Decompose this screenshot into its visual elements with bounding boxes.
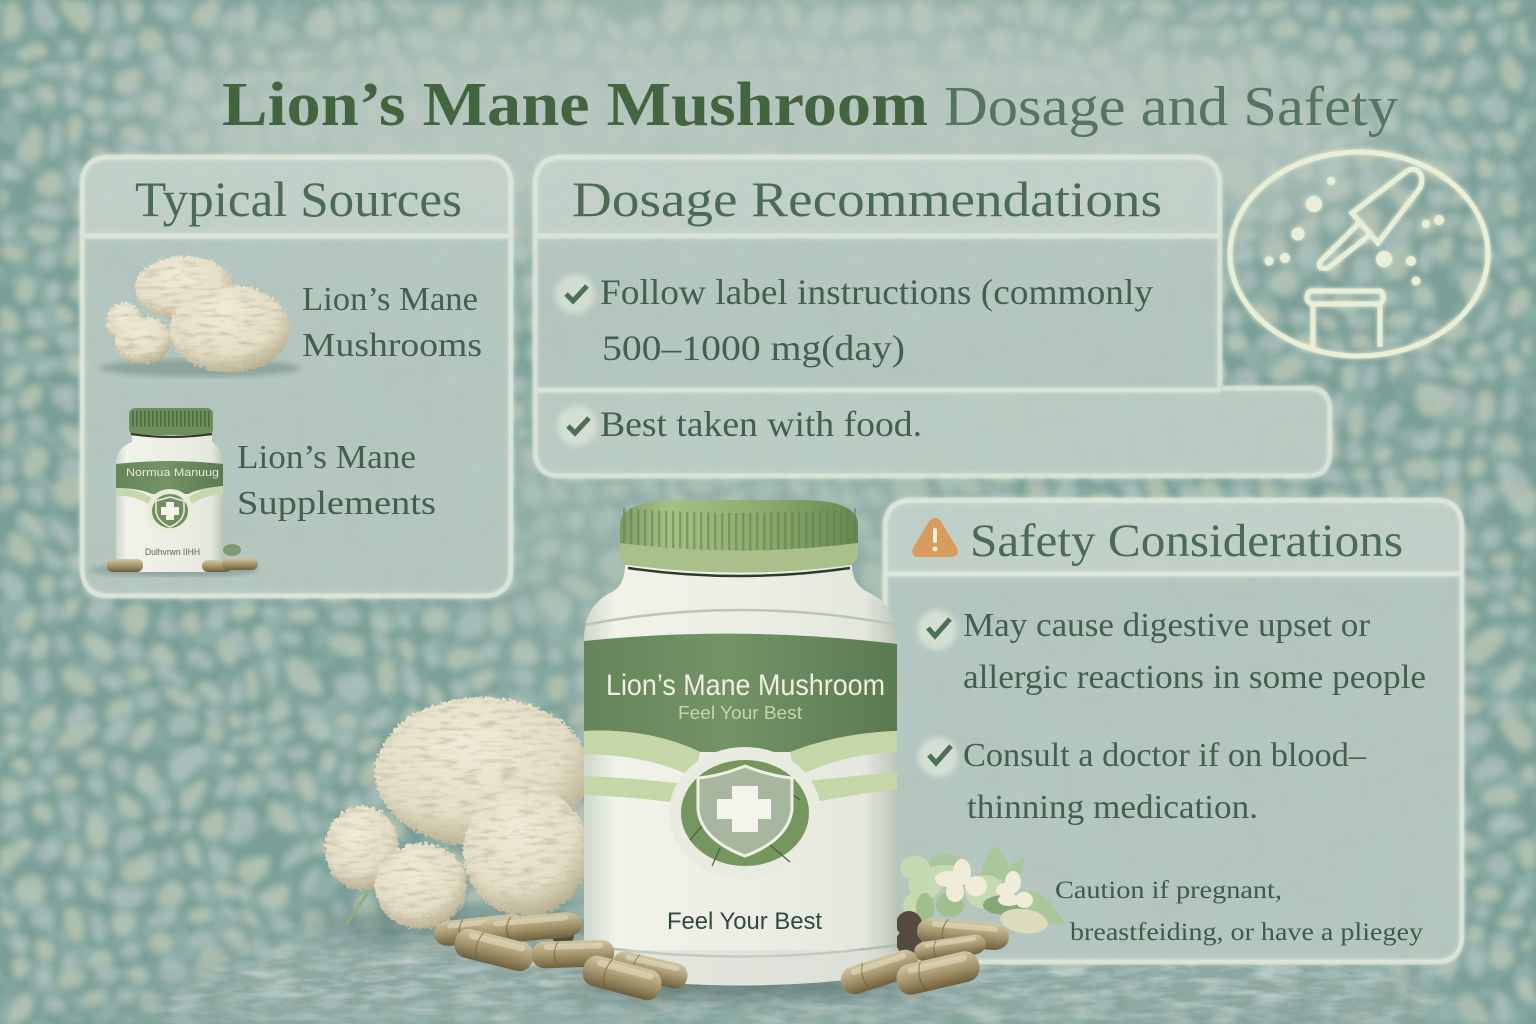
bottle cap: [620, 500, 858, 576]
check item: digestive upset: [917, 607, 1426, 696]
panel border: [535, 157, 1330, 476]
large mushrooms: [310, 697, 610, 939]
icon: small supplement bottle: Dulhvrwn IIHH: [145, 547, 200, 557]
check item: label instructions: Follow label instructions (commonly: [600, 272, 1153, 312]
dark capsules behind: [552, 911, 922, 955]
caution note: breastfeiding, or have a pliegey: [1070, 919, 1424, 946]
heading: Dosage Recommendations: [572, 171, 1162, 227]
panel backgrounds: [82, 159, 1462, 960]
bottle label text: Feel Your Best: [667, 908, 822, 935]
label: supplements: Supplements: [237, 485, 436, 522]
heading: Safety Considerations: [970, 515, 1403, 567]
icon: dropper and bottle in circle: [1230, 152, 1488, 356]
label green band: [584, 634, 897, 752]
flowers: [935, 859, 1033, 908]
panel border: [885, 500, 1462, 962]
back leaves: [920, 846, 1066, 925]
label stripes: [584, 731, 897, 805]
bottle body: [584, 565, 897, 986]
check item: consult doctor: [918, 737, 1367, 826]
bottle label text: [606, 669, 885, 935]
check item: consult doctor: Consult a doctor if on blood–: [963, 737, 1367, 774]
check item: consult doctor: thinning medication.: [967, 789, 1258, 826]
caution note: Caution if pregnant,: [1055, 877, 1282, 904]
title: Lion’s Mane Mushroom: [222, 71, 928, 139]
heading: Typical Sources: [135, 171, 462, 227]
label: mushrooms: Mushrooms: [302, 327, 482, 364]
shield emblem: [669, 747, 821, 879]
caution note: [1055, 877, 1424, 946]
bottle shadow: [560, 971, 920, 999]
floor surface: [138, 902, 1452, 1024]
leaves and flowers: [900, 846, 1066, 936]
check item: with food: Best taken with food.: [600, 404, 922, 444]
bottle label text: Feel Your Best: [678, 703, 802, 723]
bottle contours and label: [584, 610, 897, 990]
icon: warning triangle: [912, 518, 958, 557]
label: mushrooms: Lion’s Mane: [302, 281, 478, 318]
check item: label instructions: [555, 272, 1153, 368]
right capsule pile: [838, 917, 1010, 998]
icon: small supplement bottle: [90, 408, 260, 576]
check item: label instructions: 500–1000 mg(day): [602, 328, 905, 368]
icon: small supplement bottle: Normua Manuug: [126, 467, 219, 479]
check item: digestive upset: allergic reactions in some people: [963, 659, 1426, 696]
label: mushrooms: [302, 281, 482, 364]
panel border: [82, 157, 511, 596]
title: Dosage and Safety: [944, 76, 1398, 138]
panel: safety considerations: [885, 500, 1462, 962]
check item: digestive upset: May cause digestive upset or: [963, 607, 1371, 644]
label: supplements: [237, 439, 436, 522]
panel: dosage recommendations: [535, 157, 1330, 476]
capsules: [433, 911, 1010, 1003]
left capsule pile: [433, 911, 690, 1003]
panel: typical sources: [82, 157, 511, 596]
label: supplements: Lion’s Mane: [237, 439, 416, 476]
main supplement bottle: [552, 500, 922, 999]
pebble: [999, 906, 1049, 936]
bottle label text: Lion’s Mane Mushroom: [606, 669, 885, 702]
icon: lion's mane mushrooms: [100, 256, 300, 377]
title: [222, 71, 1398, 139]
